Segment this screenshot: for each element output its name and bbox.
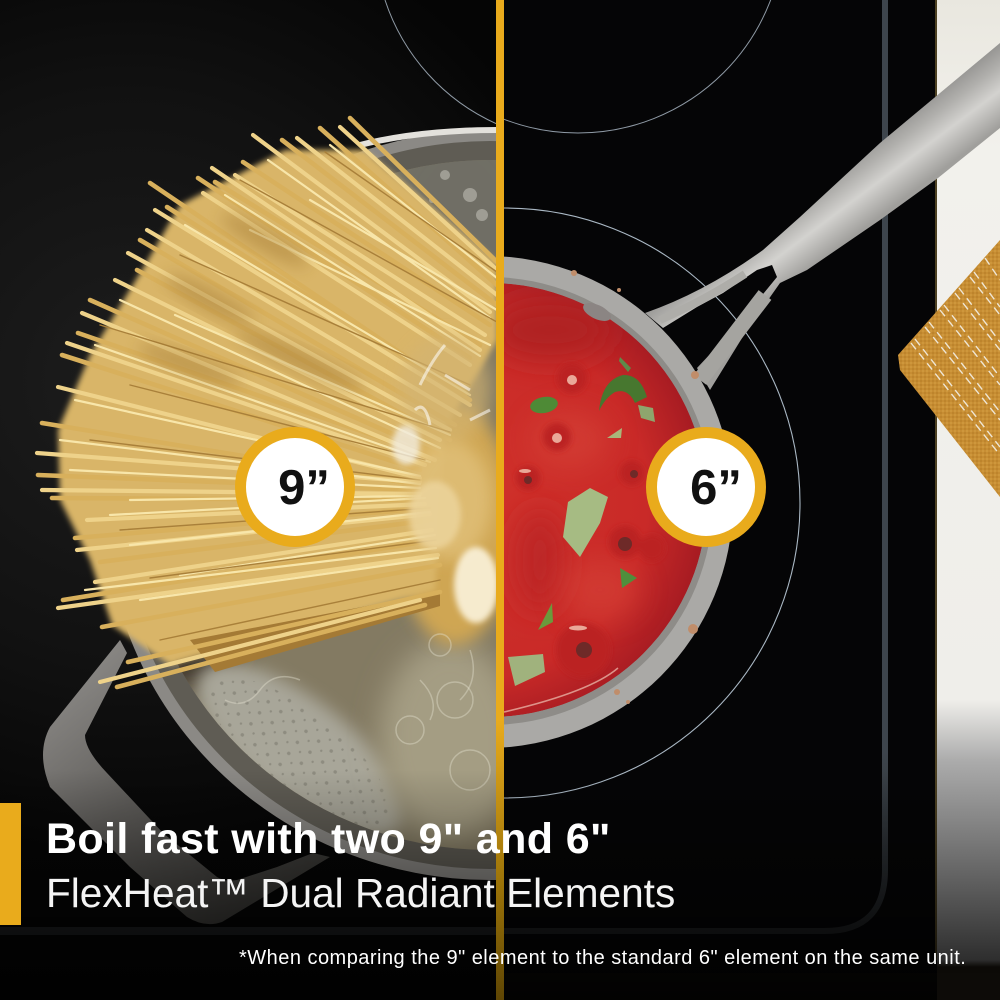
basil leaves bbox=[508, 357, 655, 686]
left half: boiling pasta bbox=[0, 0, 496, 935]
boiling foam bbox=[392, 335, 498, 623]
water bbox=[178, 160, 496, 850]
gold accent bar bbox=[0, 803, 21, 925]
burner outline bbox=[504, 208, 801, 798]
right half: cooktop with sauce pan bbox=[504, 0, 1000, 1000]
pot handle bbox=[43, 640, 330, 924]
cooktop edge bbox=[504, 0, 885, 931]
subheading: FlexHeat™ Dual Radiant Elements bbox=[46, 870, 675, 916]
pan rivet bbox=[583, 304, 610, 321]
bubbles bbox=[516, 366, 652, 662]
towel bbox=[898, 240, 1000, 497]
rim splatter bbox=[571, 270, 699, 704]
badge: 6 inch: 6” bbox=[690, 461, 742, 515]
badge: 9 inch bbox=[240, 432, 350, 542]
pan handle bbox=[645, 43, 1000, 390]
countertop bbox=[937, 0, 1000, 1000]
gold divider bbox=[496, 0, 504, 1000]
footnote: *When comparing the 9" element to the standard 6" element on the same unit. bbox=[239, 947, 966, 969]
spaghetti bundle bbox=[37, 118, 497, 687]
top burner outline bbox=[504, 0, 772, 134]
strand shadows bbox=[135, 206, 368, 399]
tomato sauce bbox=[504, 284, 702, 716]
badge: 9 inch: 9” bbox=[278, 461, 330, 515]
pan bbox=[504, 256, 730, 748]
pot rim bbox=[128, 133, 496, 880]
badge: 6 inch bbox=[652, 432, 760, 542]
headline: Boil fast with two 9" and 6" bbox=[46, 815, 611, 863]
bottom shade over photo bbox=[0, 770, 937, 1000]
cooktop edge, left bbox=[0, 927, 497, 935]
